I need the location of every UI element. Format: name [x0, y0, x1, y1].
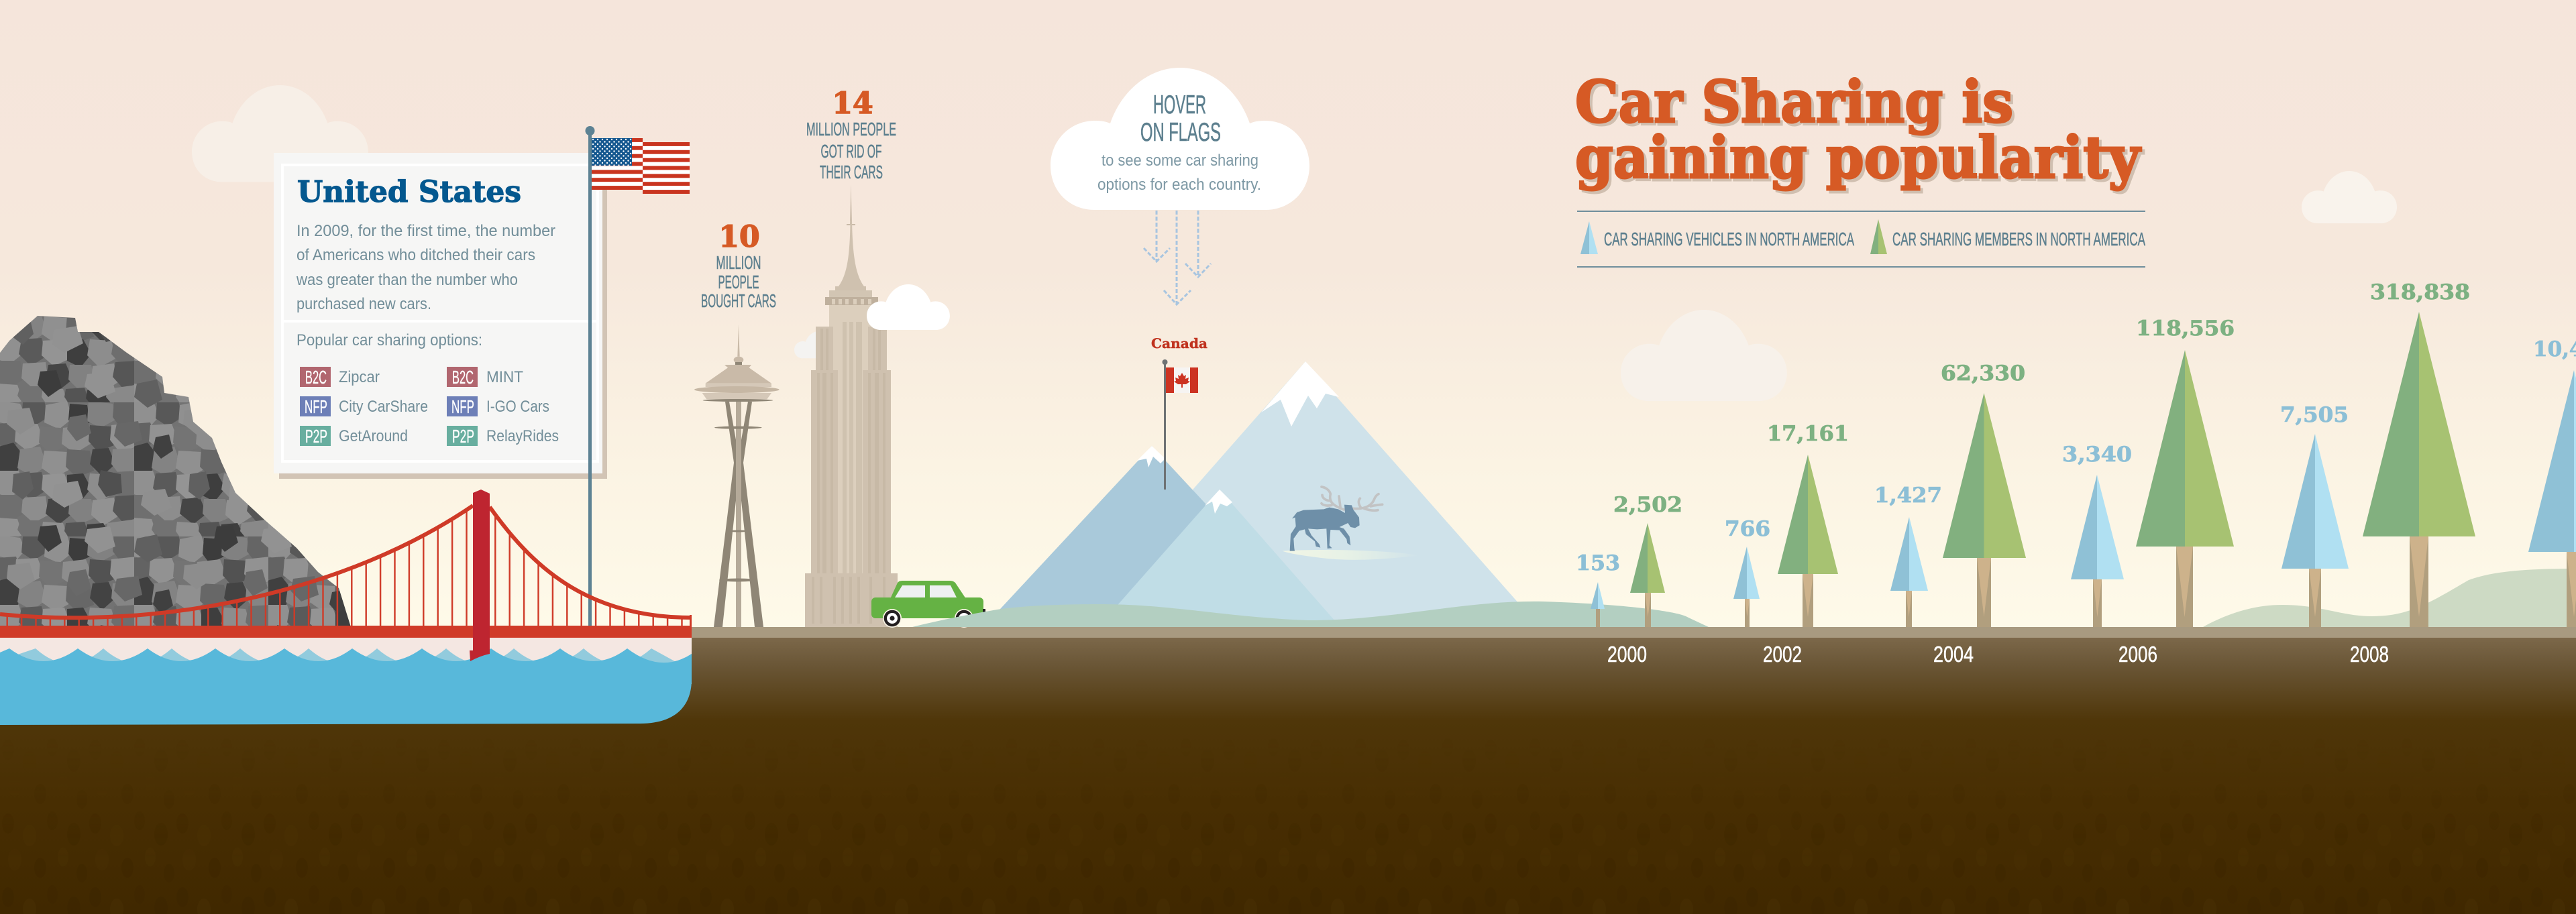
- panel shadow: [279, 158, 607, 479]
- panel heading: United States: [297, 175, 521, 209]
- tree: 2002 vehicles 766: [1725, 517, 1770, 627]
- bridge deck: [0, 626, 692, 638]
- moose on snow patch: [1283, 487, 1420, 560]
- tree: 2000 members 2,502: 2,502: [1613, 493, 1682, 517]
- panel body text: was greater than the number who: [296, 271, 518, 289]
- tree: 2002 members 17,161: [1767, 422, 1849, 627]
- sky background: [0, 0, 2576, 628]
- statistic: 10 million people bought cars: [701, 220, 776, 311]
- statistic: 14 million people got rid of their cars: 14: [832, 87, 873, 121]
- soil: [0, 638, 2576, 914]
- panel body text: Popular car sharing options:: [297, 331, 482, 349]
- tree: 2006 members 118,556: 118,556: [2136, 317, 2235, 341]
- dashed arrow right: [1185, 211, 1211, 277]
- car sharing options list: P2P: [452, 426, 474, 447]
- bridge tower: [470, 490, 490, 661]
- year labels on soil: 2000: [1607, 642, 1647, 667]
- heading: Car Sharing is gaining popularity: gaining popularity: [1578, 127, 2145, 194]
- tree: 2004 members 62,330: [1941, 361, 2026, 627]
- mountains: [983, 361, 1540, 627]
- car sharing options list: B2C: [305, 367, 327, 388]
- hover instruction cloud: [1051, 68, 1309, 210]
- tree: 2004 members 62,330: 62,330: [1941, 361, 2025, 386]
- statistic: 14 million people got rid of their cars: [806, 87, 896, 182]
- year labels on soil: 2002: [1763, 642, 1802, 667]
- statistic: 10 million people bought cars: MILLION: [716, 252, 761, 273]
- main cables: [0, 506, 473, 618]
- car sharing options list: GetAround: [339, 427, 408, 445]
- car sharing options list: P2P: [305, 426, 327, 447]
- panel body text: of Americans who ditched their cars: [297, 246, 535, 264]
- panel body text: [296, 222, 555, 349]
- year labels on soil: 2004: [1933, 642, 1974, 667]
- tree: 2010 vehicles 10,465 (cut off at edge): [2528, 337, 2576, 627]
- tree: 2000 members 2,502: [1613, 493, 1682, 627]
- panel body text: In 2009, for the first time, the number: [297, 222, 555, 240]
- car sharing options list: NFP: [305, 396, 327, 417]
- legend: CAR SHARING MEMBERS IN NORTH AMERICA: [1892, 229, 2145, 249]
- heading: Car Sharing is gaining popularity: [1575, 68, 2145, 194]
- year labels on soil: [1607, 642, 2389, 667]
- statistic: 14 million people got rid of their cars: GOT RID OF: [821, 141, 881, 162]
- tree: 2006 vehicles 3,340: 3,340: [2062, 443, 2132, 467]
- statistic: 14 million people got rid of their cars: MILLION PEOPLE: [806, 119, 896, 139]
- hover instruction cloud: options for each country.: [1097, 176, 1261, 194]
- tree: 2004 vehicles 1,427: [1874, 483, 1942, 627]
- faint cloud behind skyscraper: [794, 331, 843, 358]
- green car: [871, 581, 985, 628]
- statistic: 10 million people bought cars: PEOPLE: [718, 272, 759, 292]
- heading: Car Sharing is gaining popularity: Car Sharing is: [1575, 68, 2013, 136]
- car sharing options list: I-GO Cars: [486, 398, 549, 416]
- Canada flag: Canada: [1151, 335, 1208, 351]
- panel body text: purchased new cars.: [297, 295, 431, 313]
- pale band under bridge: [0, 638, 692, 678]
- Empire State Building: [805, 184, 898, 627]
- legend: [1577, 211, 2145, 268]
- car sharing options list: RelayRides: [486, 427, 559, 445]
- faint cloud near timeline: [1621, 310, 1787, 401]
- tree: 2008 members 318,838: [2363, 280, 2475, 627]
- pile of cars rock mound: [0, 308, 356, 630]
- heading: Car Sharing is gaining popularity: Car Sharing is: [1578, 71, 2016, 139]
- Golden Gate bridge: [0, 490, 692, 661]
- faint cloud behind United States panel: [192, 85, 368, 182]
- tree: 2008 vehicles 7,505: [2280, 403, 2349, 627]
- hover instruction cloud: ON FLAGS: [1140, 118, 1221, 147]
- tree: 2006 vehicles 3,340: [2062, 443, 2132, 627]
- statistic: 10 million people bought cars: 10: [718, 220, 760, 254]
- tree: 2000 vehicles 153: 153: [1576, 551, 1620, 575]
- back waves: [0, 648, 692, 684]
- legend: CAR SHARING VEHICLES IN NORTH AMERICA: [1604, 229, 1854, 249]
- legend icon: members: [1870, 219, 1887, 254]
- tree: 2000 vehicles 153: [1576, 551, 1620, 627]
- tree: 2008 vehicles 7,505: 7,505: [2280, 403, 2349, 427]
- ground band: [0, 627, 2576, 638]
- car sharing options list: MINT: [486, 368, 523, 386]
- Space Needle: [694, 325, 780, 627]
- faint cloud top right: [2302, 171, 2397, 223]
- tree: 2002 members 17,161: 17,161: [1767, 422, 1849, 446]
- hills right: [2203, 569, 2576, 627]
- Canada flag: [1151, 335, 1208, 490]
- car sharing options list: Zipcar: [339, 368, 380, 386]
- tree: 2002 vehicles 766: 766: [1725, 517, 1770, 541]
- United States flag and pole: [585, 126, 690, 626]
- dashed arrow middle: [1164, 211, 1191, 304]
- statistic: 10 million people bought cars: BOUGHT CARS: [701, 290, 776, 311]
- tree: 2006 members 118,556: [2136, 317, 2235, 627]
- hover instruction cloud: to see some car sharing: [1102, 152, 1258, 170]
- tree: 2008 members 318,838: 318,838: [2370, 280, 2470, 304]
- white cloud beside skyscraper: [867, 284, 950, 330]
- hills middle: [912, 602, 1709, 627]
- year labels on soil: 2006: [2118, 642, 2157, 667]
- heading: Car Sharing is gaining popularity: gaining popularity: [1575, 124, 2142, 192]
- car sharing options list: B2C: [452, 367, 474, 388]
- tree: 2004 vehicles 1,427: 1,427: [1874, 483, 1942, 508]
- year labels on soil: 2008: [2350, 642, 2389, 667]
- bridge suspender cables: [0, 503, 692, 626]
- statistic: 14 million people got rid of their cars: THEIR CARS: [820, 162, 883, 182]
- hover instruction cloud: HOVER: [1153, 91, 1206, 119]
- dashed arrow left: [1144, 211, 1170, 262]
- United States panel: [274, 153, 607, 479]
- panel card: [274, 153, 602, 473]
- legend icon: vehicles: [1580, 221, 1598, 254]
- car sharing options list: [300, 367, 559, 447]
- car sharing options list: City CarShare: [339, 398, 428, 416]
- water: [0, 648, 692, 725]
- car sharing options list: NFP: [451, 396, 474, 417]
